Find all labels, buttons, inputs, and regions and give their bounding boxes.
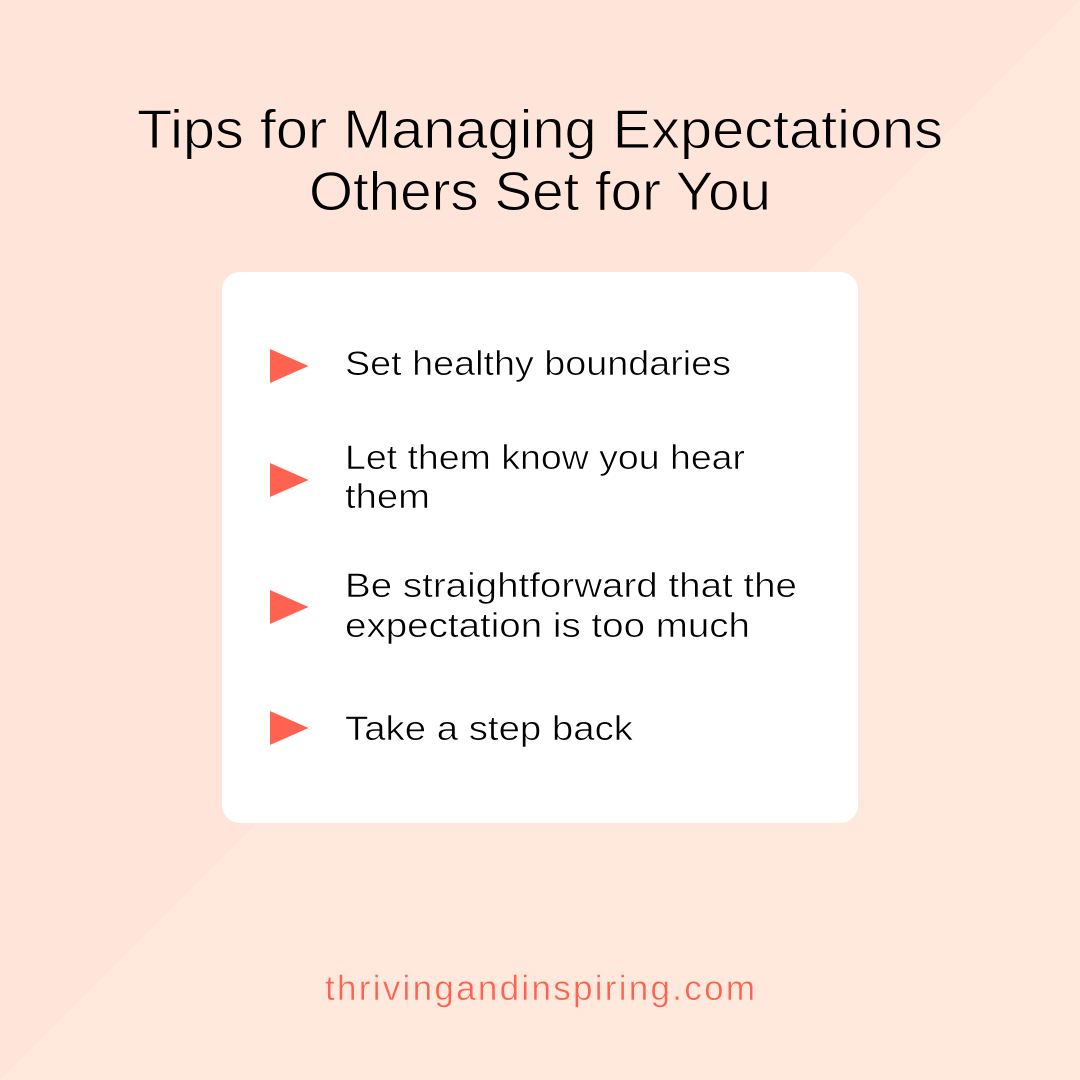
icon: arrow 3 [270, 590, 308, 624]
tip 3 text [345, 567, 797, 645]
card background [222, 272, 858, 823]
tip 3 text: expectation is too much [345, 607, 750, 645]
icon: arrow 2 [270, 463, 308, 497]
title: Tips for Managing Expectations [137, 98, 943, 160]
tip 1 text: Set healthy boundaries [345, 345, 731, 383]
tip 3 text: Be straightforward that the [345, 567, 797, 605]
title: Others Set for You [309, 160, 771, 222]
title [137, 98, 943, 222]
tip 2 text: Let them know you hear [345, 439, 745, 477]
tip 1: set healthy boundaries [270, 345, 731, 383]
tip 2 text [345, 439, 745, 516]
tip 3: be straightforward [270, 567, 797, 645]
tip 2 text: them [345, 478, 430, 516]
tip 4 text: Take a step back [345, 710, 634, 748]
panel: tips card [222, 272, 858, 823]
tip 4: take a step back [270, 710, 634, 748]
icon: arrow 1 [270, 349, 308, 383]
footer website: thrivingandinspiring.com [325, 969, 755, 1008]
tip 2: let them know you hear them [270, 439, 745, 516]
icon: arrow 4 [270, 711, 308, 745]
